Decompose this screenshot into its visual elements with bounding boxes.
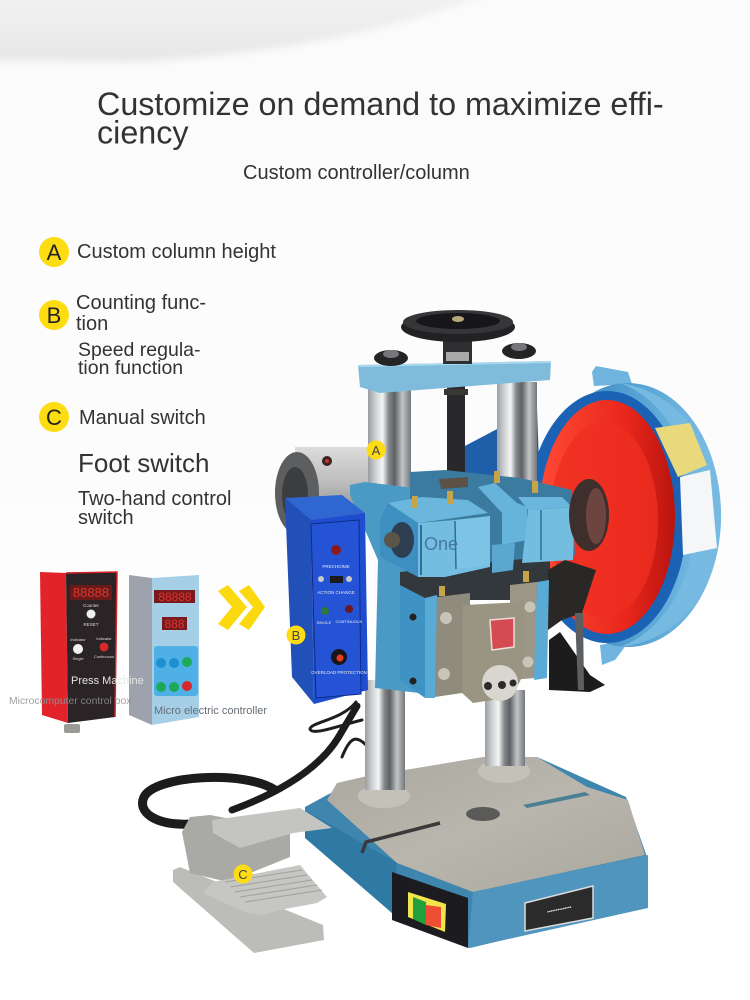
main body <box>350 482 440 695</box>
overlaid captions on controllers: Microcomputer control box <box>9 696 132 707</box>
block 1 front <box>418 517 490 577</box>
red microcomputer control box: Single <box>72 656 84 661</box>
drive hub <box>569 479 609 551</box>
press head blue casting <box>350 470 575 698</box>
badge B on panel <box>286 626 306 644</box>
feature B: counting and speed regulation: Speed regula- <box>78 339 201 361</box>
feature B: counting and speed regulation <box>39 292 206 379</box>
badge A on column <box>366 440 386 460</box>
blue control panel: ACTION CHANGE <box>317 590 355 595</box>
base <box>305 757 648 948</box>
feature C: switches: Foot switch <box>78 448 210 478</box>
overlaid captions on controllers <box>9 675 267 717</box>
blue control panel: OVERLOAD PROTECTION <box>311 670 367 675</box>
overlaid captions on controllers: Press Machine <box>71 675 144 687</box>
red microcomputer control box: Indicator <box>70 637 86 642</box>
top cover <box>212 808 332 848</box>
press machine <box>275 310 721 948</box>
lower left blue side <box>400 585 425 698</box>
badge A on column: A <box>372 443 381 458</box>
ribbed pedal <box>203 865 327 915</box>
chain and lever <box>548 560 605 692</box>
lead screw <box>444 386 468 481</box>
badge B on panel: B <box>292 628 300 643</box>
feature A: custom column height <box>39 237 276 267</box>
blue control panel: SINGLE <box>317 620 332 625</box>
lower left blue face <box>425 595 437 698</box>
blue micro electric controller <box>129 575 199 725</box>
blue control panel <box>285 495 368 704</box>
screw nut <box>439 477 468 489</box>
block 1 side <box>380 503 418 577</box>
feature A: custom column height: Custom column height <box>77 241 276 263</box>
base plate <box>173 867 324 953</box>
handwheel <box>401 310 515 342</box>
lower column right <box>485 690 525 766</box>
red microcomputer control box: 88888 <box>73 585 109 600</box>
foot switch <box>173 808 332 953</box>
badge C on foot switch: C <box>238 867 248 882</box>
red microcomputer control box: Indicator <box>96 636 112 641</box>
feature B: counting and speed regulation: Counting func- <box>76 292 206 314</box>
feature C: switches: Manual switch <box>79 407 206 429</box>
gray guide block <box>410 582 537 703</box>
feature C: switches <box>39 402 231 529</box>
feature A: custom column height: A <box>47 240 62 265</box>
nameplate <box>525 886 593 931</box>
crank nut <box>384 522 414 558</box>
cables <box>143 702 366 824</box>
red microcomputer control box: RESET <box>83 622 99 627</box>
top beam <box>358 340 551 393</box>
nameplate: ▪▪▪▪▪▪▪▪▪▪▪▪▪▪ <box>547 904 572 915</box>
motor <box>275 447 385 534</box>
right block top <box>518 497 572 510</box>
right block front <box>522 507 575 563</box>
block 1 top <box>388 497 488 523</box>
blue micro electric controller: 888 <box>164 617 185 631</box>
label One: One <box>424 534 458 554</box>
red microcomputer control box <box>40 572 117 733</box>
middle block <box>478 483 527 545</box>
feature B: counting and speed regulation: B <box>47 303 61 328</box>
overlaid captions on controllers: Micro electric controller <box>154 705 267 717</box>
blue control panel: CONTINUOUS <box>336 619 363 624</box>
title: Customize on demand to maximize effi- <box>97 86 664 122</box>
gap under blocks <box>400 556 550 600</box>
blue control panel: PRECHOIME <box>322 564 350 569</box>
red microcomputer control box: Continuous <box>94 654 114 659</box>
rear mechanism <box>410 470 575 575</box>
title <box>97 86 664 150</box>
feature C: switches: C <box>46 405 62 430</box>
feature B: counting and speed regulation: tion <box>76 313 108 335</box>
power switch box <box>392 872 468 948</box>
flywheel <box>463 366 721 665</box>
feature B: counting and speed regulation: tion function <box>78 357 183 379</box>
blue micro electric controller: 88888 <box>158 590 192 604</box>
badge C on foot switch <box>234 864 252 884</box>
subtitle: Custom controller/column <box>243 162 470 184</box>
arrow: double chevron <box>218 585 265 630</box>
red microcomputer control box: Counter <box>83 603 100 608</box>
lower right blue strip <box>534 580 549 680</box>
upper columns <box>368 382 537 497</box>
lower column left <box>365 680 405 790</box>
body <box>182 815 290 882</box>
feature C: switches: switch <box>78 507 134 529</box>
brass bolts <box>412 471 538 596</box>
feature C: switches: Two-hand control <box>78 488 231 510</box>
title: ciency <box>97 114 189 150</box>
